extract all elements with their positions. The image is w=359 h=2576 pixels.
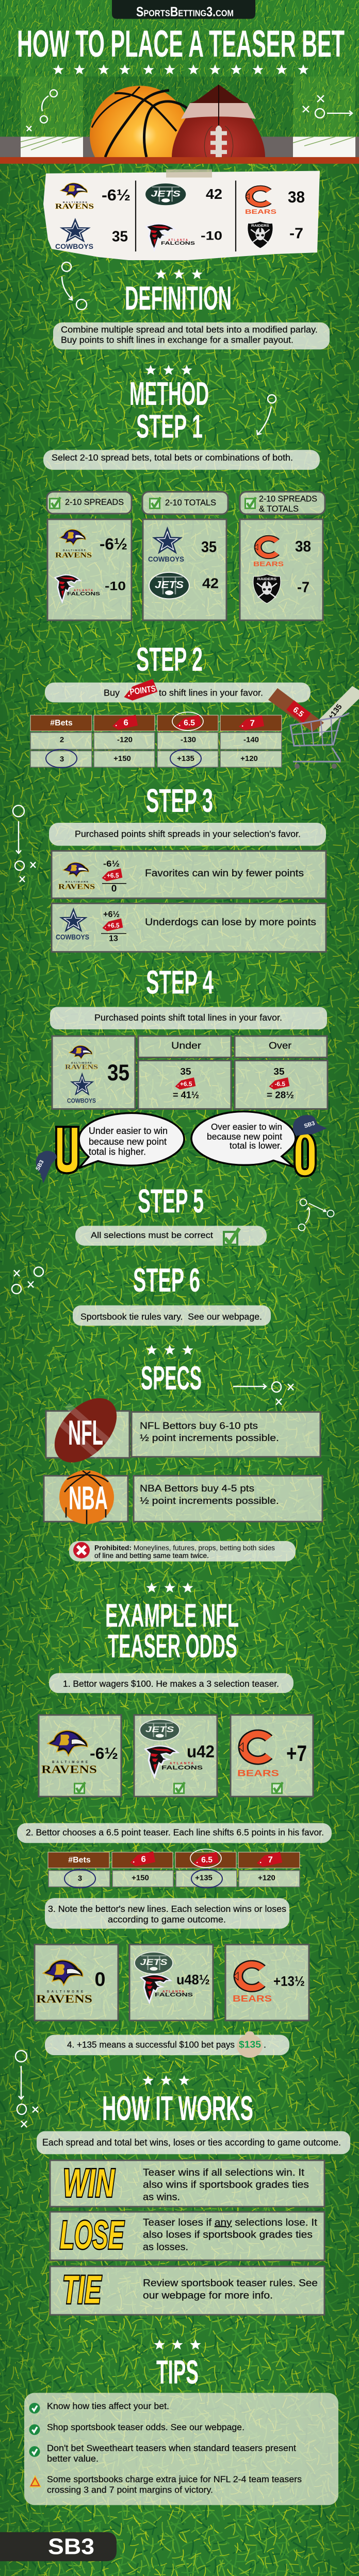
panel: example step 4: .	[264, 2039, 266, 2049]
Cowboys 35	[55, 219, 128, 250]
odds table: step 2: +150	[113, 754, 131, 763]
play diagram left	[26, 90, 57, 131]
card: bears new line: +13½	[273, 1974, 305, 1989]
Ravens -6½: -6½	[102, 186, 130, 204]
panel: how it works text	[37, 2131, 350, 2154]
card: spreads and totals: BEARS	[253, 560, 284, 568]
option header: spreads: 2-10 SPREADS	[65, 497, 124, 507]
heading: step 6: STEP 6	[133, 1261, 200, 1299]
speech bubble: over: because new point	[207, 1131, 282, 1142]
card: jets falcons new line: ATLANTA	[162, 1990, 184, 1993]
odds table: step 2: 6.5	[184, 719, 195, 727]
panel: step 1 text: Select 2-10 spread bets, total bets or combinations of both.	[52, 452, 293, 463]
panel: step 2 text: Buy	[104, 688, 120, 698]
odds table: step 2: 7	[250, 718, 255, 728]
panel: step 3 text	[49, 823, 326, 846]
odds table: example: +135	[195, 1874, 213, 1882]
card: jets falcons pick: JETS	[145, 1725, 174, 1734]
panel: NBA spec: ½ point increments possible.	[140, 1496, 279, 1506]
card: spreads: FALCONS	[67, 591, 100, 596]
card: spreads: RAVENS	[55, 551, 92, 560]
heading: example NFL teaser odds	[105, 1597, 239, 1665]
Raiders -7	[248, 222, 303, 248]
play diagram right	[303, 95, 352, 118]
odds table: example	[48, 1849, 300, 1888]
option header: totals: 2-10 TOTALS	[165, 498, 216, 507]
panel: step 4 text: Purchased points shift total lines in your favor.	[94, 1012, 282, 1023]
panel: step 6 text: Sportsbook tie rules vary. See our webpage.	[80, 1311, 262, 1321]
icon: basketball NBA	[59, 1470, 114, 1524]
card: lose: also loses if sportsbook grades ties	[143, 2229, 313, 2241]
heading: definition: DEFINITION	[125, 279, 232, 317]
icon: football	[172, 84, 265, 157]
speech bubble: over: total is lower.	[230, 1141, 282, 1151]
card: spreads	[47, 519, 132, 620]
card: totals: 35	[201, 538, 217, 555]
icon: shopping cart with tickets: 6.5	[291, 705, 305, 719]
odds table: step 2: -120	[117, 736, 133, 744]
panel: prohibited	[69, 1541, 296, 1562]
card: ravens new line: RAVENS	[36, 1992, 92, 2005]
card: favorites: -6½	[103, 859, 120, 869]
play diagram: step 3	[13, 805, 36, 882]
card: tie	[50, 2266, 324, 2315]
icon: shopping cart with tickets: +135	[326, 702, 344, 721]
Bears 38	[245, 188, 305, 215]
card: jets falcons new line: u48½	[176, 1972, 210, 1987]
icon: prohibited	[73, 1542, 90, 1558]
card: win: as wins.	[143, 2191, 180, 2202]
card: favorites: +6.5	[107, 872, 119, 879]
panel: NBA spec	[44, 1470, 322, 1524]
card: bears pick	[231, 1715, 313, 1797]
how it works stars	[142, 2075, 190, 2086]
specs stars	[146, 1345, 193, 1355]
panel: step 3 text: Purchased points shift spreads in your selection's favor.	[75, 829, 301, 839]
heading: tips: TIPS	[156, 2353, 199, 2391]
Falcons -10	[146, 224, 222, 250]
card: over: -6.5	[274, 1080, 285, 1088]
card: under: = 41½	[173, 1090, 199, 1101]
panel: prohibited: of line and betting same team twice.	[94, 1551, 209, 1560]
odds table: step 2: -140	[243, 736, 259, 744]
panel: example step 1: 1. Bettor wagers $100. He makes a 3 selection teaser.	[63, 1679, 279, 1689]
tape	[166, 170, 212, 178]
odds table: step 2: 3	[60, 755, 64, 764]
card: total line: COWBOYS	[67, 1097, 96, 1105]
Bears 38: BEARS	[245, 208, 276, 215]
letter O	[295, 1132, 316, 1176]
card: lose: as losses.	[143, 2241, 188, 2252]
card: spreads and totals	[240, 519, 323, 620]
panel: definition text: Combine multiple spread and total bets into a modified parlay.	[61, 325, 318, 335]
card: bears pick: BEARS	[237, 1768, 279, 1778]
title stars	[53, 64, 309, 75]
panel: tips: Know how ties affect your bet.	[47, 2401, 169, 2411]
play diagram: step 6	[12, 1267, 43, 1294]
brand tab: SportsBetting3.com	[136, 5, 234, 20]
card: underdogs: COWBOYS	[56, 933, 89, 941]
card: underdogs: +6.5	[107, 922, 120, 929]
letter U	[56, 1127, 78, 1173]
card: favorites: 0	[111, 884, 117, 894]
card: total line: BALTIMORE	[71, 1061, 92, 1064]
card: spreads and totals: -7	[297, 580, 309, 596]
heading: method: METHOD	[129, 375, 209, 412]
odds table: step 2: -130	[181, 736, 196, 744]
Cowboys 35: 35	[112, 228, 128, 245]
card: lose: Teaser loses if any selections lose. It	[143, 2217, 317, 2228]
speech bubble: under: Under easier to win	[89, 1126, 168, 1137]
option header: totals	[142, 492, 228, 514]
card: ravens new line: 0	[94, 1969, 106, 1990]
card: win: Teaser wins if all selections win. It	[143, 2167, 304, 2178]
panel: example step 3: 3. Note the bettor's new lines. Each selection wins or loses	[48, 1904, 286, 1914]
option header: spreads	[47, 492, 132, 514]
heading: step 3: STEP 3	[146, 782, 213, 819]
heading: step 5: STEP 5	[138, 1182, 204, 1219]
heading: step 1: STEP 1	[136, 408, 203, 445]
panel: example step 4: $135	[239, 2039, 261, 2050]
odds table: step 2: 2	[60, 736, 64, 744]
odds table: example: 6.5	[201, 1856, 213, 1865]
panel: tips: Shop sportsbook teaser odds. See our webpage.	[47, 2422, 244, 2432]
card: underdogs: Underdogs can lose by more points	[145, 917, 316, 928]
header hero	[0, 0, 359, 157]
play diagram: definition	[62, 262, 87, 310]
panel: example step 1	[49, 1673, 293, 1693]
speech bubble: over: Over easier to win	[211, 1122, 282, 1132]
panel: example step 3: according to game outcome.	[108, 1914, 226, 1925]
odds table: step 2: 6	[123, 718, 128, 727]
heading: specs: SPECS	[141, 1359, 202, 1397]
Bears 38: 38	[288, 188, 305, 206]
card: over: = 28½	[267, 1090, 294, 1101]
card: ravens pick: RAVENS	[41, 1763, 97, 1776]
card: jets falcons new line: JETS	[140, 1957, 168, 1967]
panel: step 5 text	[75, 1226, 267, 1246]
option header: spreads and totals: & TOTALS	[259, 504, 299, 514]
card: totals: COWBOYS	[148, 555, 184, 563]
odds table: step 2: #Bets	[50, 719, 73, 727]
speech bubble: over	[191, 1111, 296, 1167]
definition stars	[155, 269, 203, 279]
icon: shopping cart with tickets	[268, 686, 359, 769]
odds table: step 2	[30, 712, 282, 768]
panel: definition text: Buy points to shift lines in exchange for a smaller payout.	[61, 334, 293, 345]
card: bears new line	[225, 1944, 309, 2021]
points tag: POINTS	[129, 684, 156, 697]
header divider band	[0, 157, 359, 164]
method stars	[145, 365, 192, 375]
icon: basketball	[90, 86, 188, 157]
card: jets falcons pick: ATLANTA	[170, 1762, 193, 1766]
panel: step 4 text	[50, 1007, 327, 1029]
card: over: 35	[273, 1066, 285, 1077]
odds table: example: +120	[258, 1874, 275, 1882]
card: total line	[52, 1036, 135, 1109]
card: under	[138, 1036, 231, 1109]
card: win: WIN	[63, 2161, 115, 2205]
card: underdogs: 13	[109, 935, 118, 943]
play diagram: specs	[233, 1382, 293, 1405]
card: favorites: BALTIMORE	[66, 880, 89, 884]
icon: warning	[29, 2475, 41, 2487]
card: spreads: ATLANTA	[74, 589, 93, 592]
panel: NFL spec	[42, 1386, 320, 1474]
card: totals: 42	[202, 575, 219, 591]
card: underdogs	[52, 903, 326, 952]
icon: SB3 hat on U: SB3	[35, 1159, 45, 1172]
Falcons -10: FALCONS	[161, 241, 195, 246]
speech bubble: under: total is higher.	[89, 1147, 146, 1158]
Ravens -6½: BALTIMORE	[63, 201, 88, 204]
odds table: example: 7	[268, 1855, 273, 1865]
panel: definition text	[53, 323, 330, 349]
card: ravens new line: BALTIMORE	[47, 1990, 83, 1993]
option header: spreads and totals	[240, 492, 325, 514]
panel: step 1 text	[43, 450, 320, 470]
icon: check	[223, 1228, 239, 1246]
odds table: example: 3	[78, 1874, 82, 1883]
panel: tips: Don't bet Sweetheart teasers when standard teasers present	[47, 2443, 296, 2453]
panel: tips: crossing 3 and 7 point margins of victory.	[47, 2485, 213, 2495]
card: tie: our webpage for more info.	[143, 2290, 273, 2301]
play diagram: step 5	[298, 1199, 334, 1231]
card: tie: Review sportsbook teaser rules. See	[143, 2278, 318, 2289]
panel: step 2 text: to shift lines in your favor.	[159, 688, 263, 698]
panel: taped note with sample lines	[43, 170, 320, 260]
card: jets falcons new line: FALCONS	[155, 1992, 193, 1998]
card: bears pick: +7	[286, 1741, 307, 1766]
footer badge: SB3	[48, 2534, 94, 2559]
icon: SB3 hat on O: SB3	[303, 1120, 316, 1129]
card: spreads and totals: 38	[295, 538, 311, 555]
panel: NBA spec: NBA Bettors buy 4-5 pts	[140, 1483, 254, 1494]
card: over: Over	[269, 1041, 291, 1052]
card: total line: 35	[107, 1060, 129, 1086]
Falcons -10: ATLANTA	[168, 239, 188, 242]
odds table: step 2: +135	[177, 754, 194, 763]
icon: football NFL	[42, 1386, 129, 1474]
card: under: Under	[171, 1041, 201, 1052]
panel: example step 4	[45, 2031, 289, 2058]
panel: example step 3	[45, 1898, 289, 1929]
Ravens -6½	[55, 183, 130, 211]
panel: step 5 text: All selections must be correct	[91, 1230, 213, 1240]
odds table: example: 6	[141, 1854, 146, 1864]
icon: SB3 hat on O	[293, 1115, 327, 1136]
card: spreads: BALTIMORE	[63, 549, 86, 552]
card: lose	[50, 2212, 324, 2260]
card: tie: TIE	[62, 2268, 102, 2312]
Raiders -7: RAIDERS	[251, 224, 269, 228]
Falcons -10: -10	[201, 229, 222, 243]
play diagram: example	[15, 2050, 38, 2127]
card: totals: JETS	[155, 580, 184, 591]
card: jets falcons new line	[129, 1944, 213, 2021]
card: ravens pick	[39, 1715, 121, 1797]
panel: example step 2: 2. Bettor chooses a 6.5 point teaser. Each line shifts 6.5 points in his favor.	[26, 1827, 324, 1837]
icon: money bag	[237, 2031, 263, 2058]
panel: how it works text: Each spread and total bet wins, loses or ties according to game outcome.	[42, 2137, 341, 2147]
footer badge	[0, 2532, 117, 2561]
card: bears new line: BEARS	[233, 1993, 272, 2004]
heading: step 2: STEP 2	[136, 640, 203, 678]
Raiders -7: -7	[289, 226, 303, 242]
panel: prohibited: Prohibited: Moneylines, futures, props, betting both sides	[94, 1544, 275, 1552]
card: total line: RAVENS	[65, 1063, 98, 1071]
card: favorites	[52, 851, 326, 899]
icon: basketball NBA: NBA	[69, 1479, 108, 1517]
panel: step 2 text	[45, 679, 311, 702]
card: jets falcons pick: u42	[187, 1742, 215, 1761]
speech bubble: under: because new point	[89, 1137, 167, 1147]
card: ravens new line	[35, 1944, 118, 2021]
card: favorites: RAVENS	[58, 883, 95, 891]
card: lose: LOSE	[60, 2213, 124, 2257]
panel: NFL spec: ½ point increments possible.	[140, 1433, 279, 1444]
panel: example step 4: 4. +135 means a successful $100 bet pays	[67, 2039, 235, 2049]
card: under: +6.5	[180, 1080, 192, 1088]
card: underdogs: +6½	[103, 909, 120, 919]
card: over	[235, 1036, 328, 1109]
tips stars	[154, 2340, 201, 2349]
icon: football NFL: NFL	[68, 1414, 103, 1452]
heading: example NFL teaser odds: EXAMPLE NFL	[105, 1597, 239, 1634]
Ravens -6½: RAVENS	[55, 202, 94, 211]
Jets 42: 42	[206, 186, 222, 202]
Jets 42	[145, 183, 222, 206]
panel: NFL spec: NFL Bettors buy 6-10 pts	[140, 1420, 258, 1431]
icon: SB3 hat on U	[35, 1151, 57, 1183]
panel: tips	[24, 2393, 338, 2505]
option header: spreads and totals: 2-10 SPREADS	[259, 494, 317, 503]
example stars	[146, 1582, 193, 1592]
card: jets falcons pick	[134, 1715, 217, 1797]
panel: step 6 text	[73, 1306, 271, 1326]
panel: tips: better value.	[47, 2453, 99, 2464]
odds table: example: #Bets	[68, 1856, 91, 1865]
card: spreads and totals: RAIDERS	[257, 578, 277, 581]
card: jets falcons pick: FALCONS	[161, 1765, 203, 1771]
odds table: example: +150	[132, 1874, 149, 1882]
heading: step 4: STEP 4	[146, 963, 214, 1001]
card: totals	[143, 519, 226, 620]
card: spreads: -6½	[100, 534, 127, 553]
card: spreads: -10	[105, 580, 126, 594]
card: under: 35	[180, 1066, 191, 1077]
card: win: also wins if sportsbook grades ties	[143, 2179, 309, 2191]
panel: tips: Some sportsbooks charge extra juice for NFL 2-4 team teasers	[47, 2474, 302, 2484]
Cowboys 35: COWBOYS	[55, 242, 93, 250]
card: ravens pick: BALTIMORE	[52, 1761, 88, 1764]
heading: example NFL teaser odds: TEASER ODDS	[108, 1627, 237, 1665]
odds table: step 2: +120	[240, 754, 258, 763]
speech bubble: under	[79, 1113, 184, 1168]
card: ravens pick: -6½	[90, 1744, 118, 1762]
play diagram: step 1	[257, 395, 276, 435]
panel: example step 2	[17, 1823, 332, 1843]
card: win	[50, 2160, 324, 2207]
points tag	[122, 679, 158, 702]
brand tab	[112, 0, 255, 20]
Jets 42: JETS	[151, 189, 181, 198]
card: favorites: Favorites can win by fewer points	[145, 868, 304, 879]
